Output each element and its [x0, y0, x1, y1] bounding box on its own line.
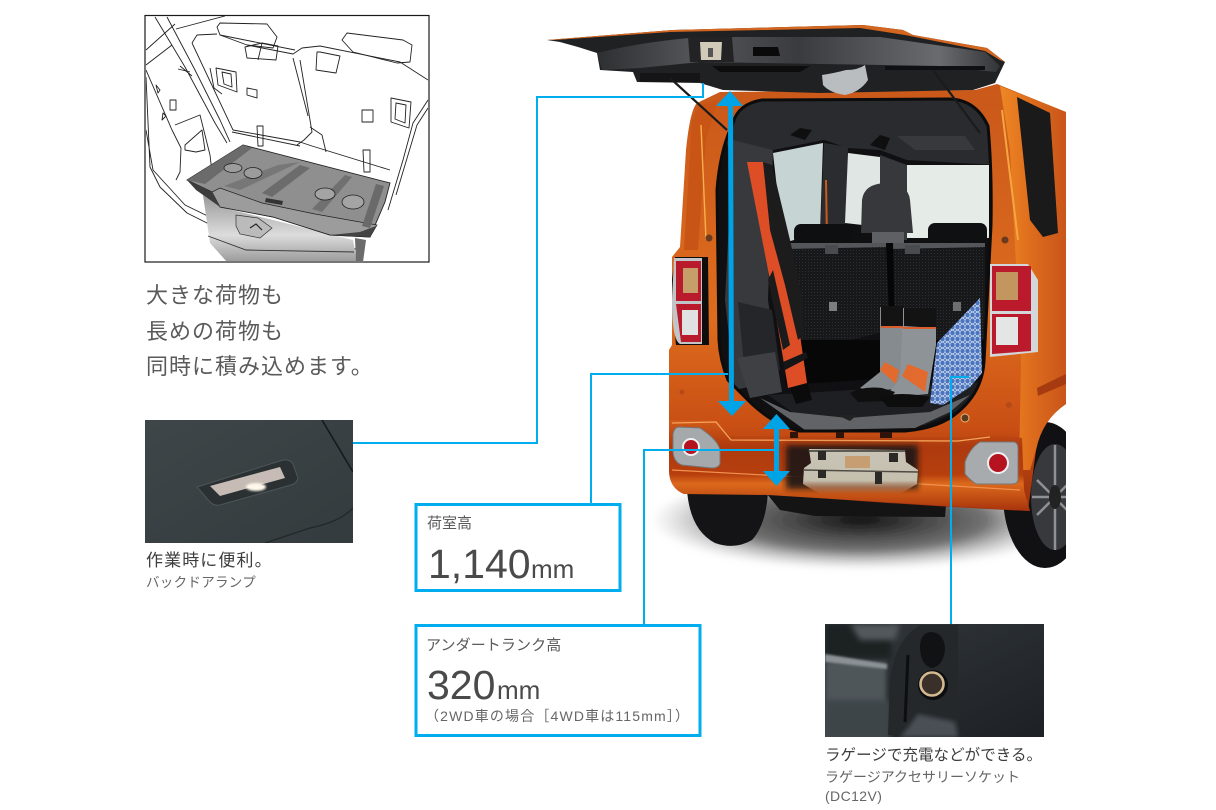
caption: accessory socket: (DC12V)	[825, 788, 882, 804]
fishing net	[930, 298, 982, 405]
opened back door	[547, 25, 1005, 95]
caption: back door lamp: バックドアランプ	[146, 575, 256, 590]
caption: accessory socket	[825, 746, 1042, 804]
callout: under trunk height: 320	[427, 662, 495, 708]
photo: accessory socket	[825, 624, 1044, 740]
callout: under trunk height: アンダートランク高	[426, 637, 561, 654]
photo: back door lamp	[145, 420, 353, 543]
callout: luggage room height: 1,140	[428, 541, 531, 587]
arrow: under trunk height	[763, 414, 790, 486]
leader: under trunk box	[644, 450, 776, 625]
left tail lamp	[672, 257, 709, 345]
right tail lamp	[990, 264, 1038, 357]
callout: luggage room height: mm	[531, 554, 574, 584]
rubber boots	[850, 306, 936, 407]
leader: luggage height box	[591, 374, 728, 504]
caption: accessory socket: ラゲージアクセサリーソケット	[825, 769, 1020, 785]
opening interior	[718, 100, 990, 430]
rear reflector left	[673, 427, 720, 468]
callout: under trunk height: mm	[497, 675, 540, 705]
ground shadow	[658, 495, 1018, 569]
under-trunk toolbox seen through bumper	[786, 445, 918, 494]
rear tyres	[687, 422, 1087, 568]
caption: back door lamp: 作業時に便利。	[146, 551, 273, 570]
left pillar highlight	[684, 143, 705, 250]
body reflector details	[961, 414, 969, 422]
callout: luggage room height: 荷室高	[427, 515, 472, 532]
under body	[767, 494, 947, 517]
orange long pole	[747, 162, 812, 404]
callout: under trunk height: （2WD車の場合［4WD車は115mm］）	[425, 708, 689, 724]
gas struts	[670, 70, 980, 133]
tailgate latch	[688, 37, 734, 62]
body side panel	[1000, 86, 1066, 470]
text block: main copy: 同時に積み込めます。	[146, 354, 374, 379]
leader: back door lamp	[353, 83, 703, 443]
side window	[1017, 97, 1058, 237]
text block: main copy: 長めの荷物も	[146, 319, 284, 344]
callout: under trunk height	[416, 626, 700, 736]
dome lamp	[822, 65, 868, 95]
car photo: rear view with open back door	[547, 25, 1087, 570]
caption: accessory socket: ラゲージで充電などができる。	[825, 746, 1042, 764]
leader lines and arrows	[353, 83, 969, 625]
infographic canvas	[144, 14, 1066, 804]
opening rubber seal	[717, 99, 991, 431]
arrow: luggage height	[716, 91, 746, 416]
bumper	[669, 420, 1030, 511]
text block: main copy	[146, 283, 374, 379]
text block: main copy: 大きな荷物も	[146, 283, 284, 308]
panel: line-art diagram of luggage tray	[145, 16, 429, 262]
handle slot	[753, 47, 780, 56]
leader: accessory socket	[951, 377, 969, 624]
rear reflector right	[965, 442, 1018, 484]
caption: back door lamp	[146, 551, 273, 590]
body shell	[669, 84, 1066, 511]
callout: luggage room height	[416, 504, 620, 590]
